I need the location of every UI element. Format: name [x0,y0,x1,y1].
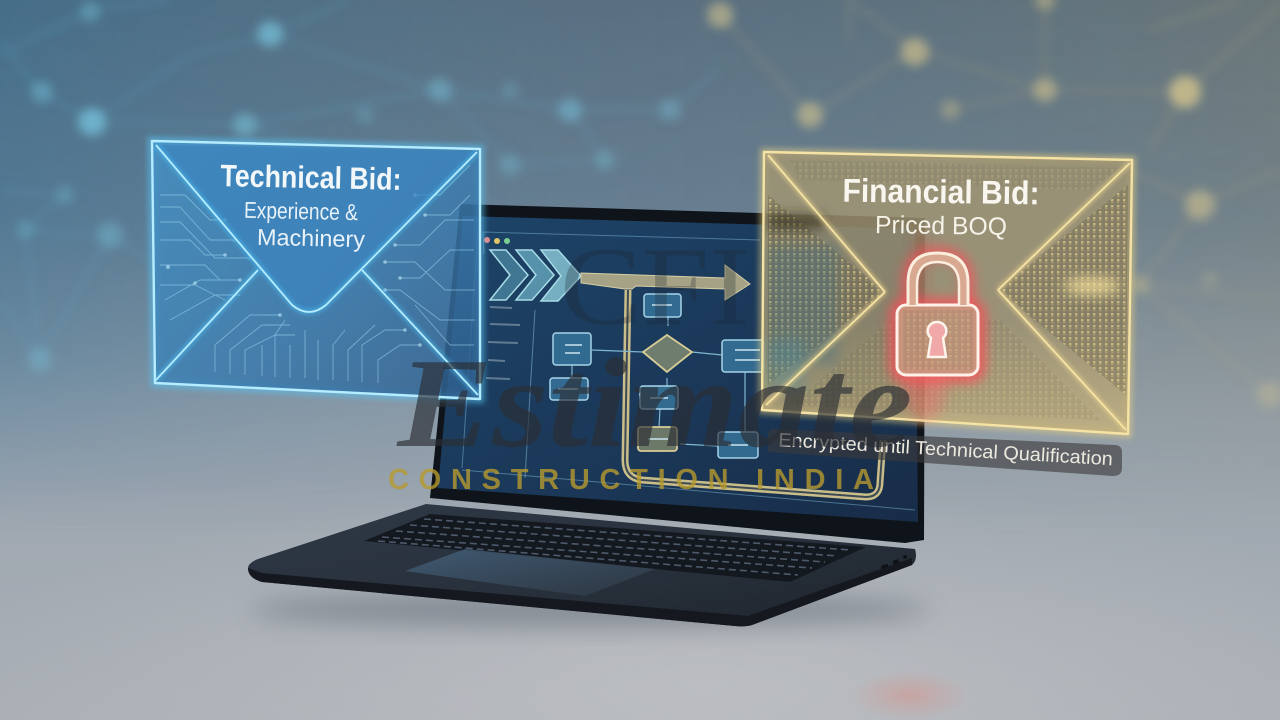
blurred network: blue nodes [0,0,720,372]
circuit nodes [166,193,427,347]
envelope body [762,152,1132,434]
data rain: lower [790,320,1100,420]
padlock glow [896,253,979,376]
laptop base [248,504,916,626]
text: Experience &: Experience & [244,197,358,225]
gold loop [625,290,883,497]
flow box 3 [722,340,764,372]
circuit traces [160,165,475,383]
blurred network: gold nodes [707,0,1280,408]
envelope outer glow [152,141,480,399]
padlock body [897,305,978,375]
flow box 1 [644,294,681,317]
screen lid [430,204,925,543]
laptop shadow [250,592,930,628]
laptop [248,204,930,628]
lens glow right [1064,277,1120,295]
window chrome [462,232,915,510]
icon: padlock [896,253,979,420]
watermark: Construction India: CONSTRUCTION INDIA [388,464,874,496]
envelope lines glow [766,155,1130,430]
watermark: Estimate: Estimate [396,332,913,474]
data rain: left [768,195,885,385]
red glow column [903,350,947,420]
gold envelope: Financial Bid [762,152,1132,434]
flap [156,145,477,312]
keyboard [364,514,866,582]
chevrons [490,250,581,301]
blue envelope: Technical Bid [152,141,480,399]
flow box 6 [718,432,758,458]
trackpad [405,549,655,596]
envelope body [152,141,480,399]
envelope lines [762,152,1132,434]
text: Machinery: Machinery [257,224,366,252]
envelope outer glow [762,152,1132,434]
caption: Encrypted until Technical Qualification: Encrypted until Technical Qualification [778,430,1113,470]
laptop glimpses through glass [765,215,927,392]
data rain: right [998,185,1128,395]
heading: Financial Bid: Financial Bid: [842,172,1040,211]
data rain: upper [790,160,1120,190]
padlock shackle [912,258,964,305]
flowchart [550,294,764,458]
envelope lines [152,141,480,399]
watermark logo [388,225,912,496]
text: Priced BOQ: Priced BOQ [875,211,1007,241]
watermark: CFI: CFI [560,225,750,349]
flow box 4 [550,378,588,400]
keyhole [928,322,946,357]
screen display [438,216,918,522]
gold process arrow [581,265,750,300]
padlock texture [903,310,973,370]
flow box 2 [553,333,591,365]
ports [881,555,907,569]
envelope lines glow [156,145,478,395]
flow box gold [638,427,677,451]
flow box 5 [640,386,678,409]
heading: Technical Bid: Technical Bid: [220,158,402,197]
decision diamond [643,335,692,372]
